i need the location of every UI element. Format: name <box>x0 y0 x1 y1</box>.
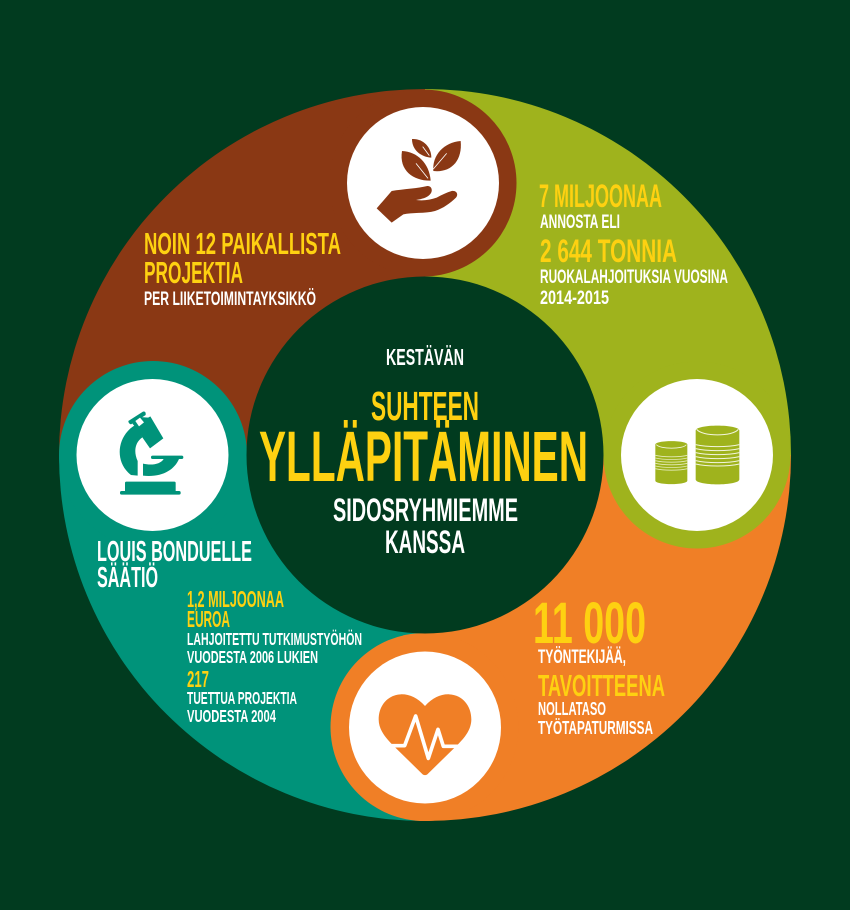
segment head: green <box>604 362 790 548</box>
text block: local projects <box>144 227 341 310</box>
text block: employees: TAVOITTEENA <box>538 669 665 703</box>
text block: foundation: SÄÄTIÖ <box>97 561 158 594</box>
text block: foundation: VUODESTA 2004 <box>187 706 276 726</box>
text block: local projects: PROJEKTIA <box>144 256 243 290</box>
text block: food donations: 7 MILJOONAA <box>539 178 662 214</box>
ring segment: green <box>425 89 791 455</box>
text block: food donations: ANNOSTA ELI <box>540 212 620 233</box>
ring segment: teal <box>59 455 425 821</box>
centre circle <box>246 276 604 634</box>
text block: foundation: 1,2 MILJOONAA <box>187 586 284 612</box>
ring segment: orange <box>425 455 791 821</box>
text block: employees: TYÖTAPATURMISSA <box>538 718 653 738</box>
title: centre heading: SUHTEEN <box>371 383 479 429</box>
icon: food cans <box>621 379 773 531</box>
text block: employees: 11 000 <box>533 591 646 656</box>
text block: foundation: LOUIS BONDUELLE <box>97 536 252 568</box>
text block: foundation <box>97 536 362 726</box>
ring segment: brown <box>59 89 425 455</box>
text block: food donations: 2014-2015 <box>540 288 609 309</box>
text block: employees <box>533 591 665 738</box>
text block: foundation: EUROA <box>187 606 230 632</box>
title: centre heading: SIDOSRYHMIEMME <box>333 492 518 528</box>
icon: microscope <box>76 379 228 531</box>
text block: foundation: LAHJOITETTU TUTKIMUSTYÖHÖN <box>187 629 362 649</box>
segment head: teal <box>59 361 247 549</box>
icon: heart with pulse <box>349 652 501 804</box>
text block: foundation: 217 <box>187 666 209 692</box>
text block: employees: NOLLATASO <box>538 699 606 719</box>
text block: employees: TYÖNTEKIJÄÄ, <box>538 647 626 668</box>
title: centre heading: KESTÄVÄN <box>386 344 464 370</box>
title: centre heading <box>259 344 588 560</box>
text block: local projects: PER LIIKETOIMINTAYKSIKKÖ <box>144 289 316 310</box>
segment head: orange <box>330 633 518 821</box>
title: centre heading: YLLÄPITÄMINEN <box>259 418 588 497</box>
icon: hand holding plant <box>347 107 499 259</box>
text block: food donations: 2 644 TONNIA <box>540 233 677 269</box>
text block: food donations: RUOKALAHJOITUKSIA VUOSINA <box>540 267 728 288</box>
text block: foundation: TUETTUA PROJEKTIA <box>187 688 297 708</box>
text block: local projects: NOIN 12 PAIKALLISTA <box>144 227 341 261</box>
segment head: brown <box>330 90 516 276</box>
text block: food donations <box>539 178 728 309</box>
title: centre heading: KANSSA <box>385 524 465 560</box>
text block: foundation: VUODESTA 2006 LUKIEN <box>187 647 318 667</box>
